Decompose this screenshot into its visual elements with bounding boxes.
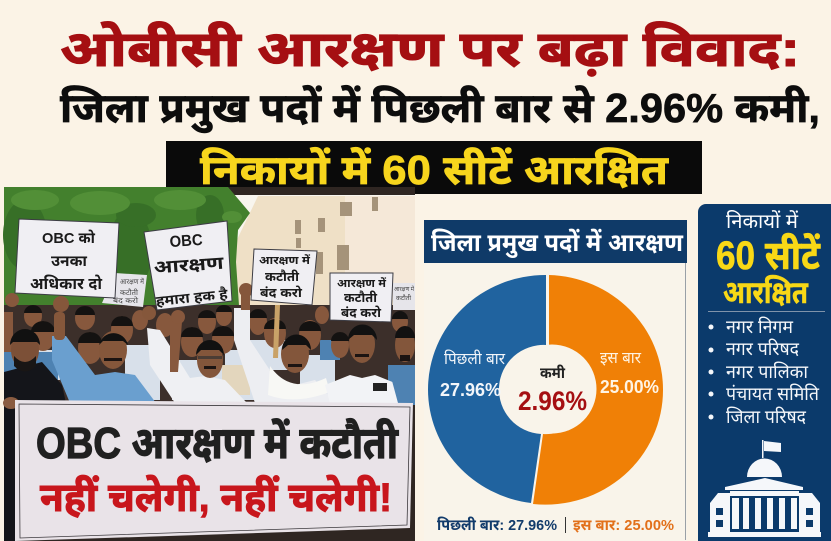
chart legend: [437, 517, 674, 534]
list of bodies: नगर परिषद: [726, 339, 799, 359]
highlighted subtitle: निकायों में 60 सीटें आरक्षित: [200, 147, 670, 193]
label: previous: 27.96%: [440, 380, 501, 400]
placard: आरक्षण में कटौती बंद करो (centre): बंद करो: [260, 285, 303, 300]
small sign right: आरक्षण में: [394, 285, 414, 293]
panel heading: 60 सीटें: [716, 233, 821, 278]
crowd: [3, 283, 415, 541]
placard: आरक्षण में कटौती बंद करो (centre): [251, 249, 317, 305]
panel heading: आरक्षित: [723, 275, 809, 310]
label: current: [600, 350, 659, 397]
placard: OBC आरक्षण हमारा हक है: आरक्षण: [153, 253, 225, 278]
slice: current 25.00%: [533, 275, 663, 505]
raised arm at far left: [4, 293, 19, 352]
man in blue at far right: [388, 326, 415, 403]
small sign behind: कटौती: [120, 289, 138, 297]
small sign behind: [102, 273, 147, 307]
panel heading: जिला प्रमुख पदों में आरक्षण: [431, 228, 684, 258]
icon: government building with flag: [708, 440, 821, 537]
protest photo: [3, 187, 415, 541]
placard: OBC आरक्षण हमारा हक है: [144, 221, 232, 310]
man with white scarf: [234, 283, 335, 403]
panel heading: निकायों में: [726, 209, 799, 233]
slice: previous 27.96%: [428, 275, 546, 503]
panel heading: [716, 209, 821, 310]
centre hole: 2.96%: [518, 386, 587, 416]
panel: district chief reservation: [424, 220, 687, 541]
placard: आरक्षण में कटौती बंद करो (right): कटौती: [344, 290, 378, 305]
title block: [60, 21, 820, 194]
centre hole: [508, 344, 596, 434]
panel heading: [424, 220, 687, 263]
banner: OBC आरक्षण में कटौती: [36, 418, 399, 468]
chart legend: पिछली बार: 27.96%: [437, 517, 557, 534]
placard: आरक्षण में कटौती बंद करो (centre): आरक्षण में: [259, 254, 311, 267]
list of bodies: नगर निगम: [726, 317, 794, 337]
centre hole: कमी: [540, 365, 566, 382]
label: previous: [440, 350, 505, 400]
label: current: 25.00%: [600, 377, 659, 397]
small sign behind: आरक्षण में: [120, 277, 145, 286]
label: previous: पिछली बार: [444, 350, 505, 368]
banner: नहीं चलेगी, नहीं चलेगी!: [40, 475, 392, 520]
placard: आरक्षण में कटौती बंद करो (right): [330, 273, 393, 322]
small sign behind: बंद करो: [113, 297, 138, 305]
panel: bodies with 60 reserved seats: [698, 204, 831, 541]
small sign right: कटौती: [396, 294, 411, 302]
donut chart: [428, 275, 663, 505]
man in white shirt: [142, 306, 247, 403]
list of bodies: नगर पालिका: [726, 362, 808, 382]
man in black shirt: [3, 329, 66, 541]
title line 2: जिला प्रमुख पदों में पिछली बार से 2.96% कमी,: [60, 84, 820, 133]
placard: OBC आरक्षण हमारा हक है: हमारा हक है: [155, 284, 229, 309]
placard: OBC को उनका अधिकार दो: उनका: [51, 253, 88, 270]
list of bodies: जिला परिषद: [726, 407, 806, 427]
placard: OBC को उनका अधिकार दो: अधिकार दो: [30, 275, 102, 293]
chart legend: इस बार: 25.00%: [573, 517, 674, 534]
placard: OBC आरक्षण हमारा हक है: OBC: [169, 232, 204, 251]
placard: आरक्षण में कटौती बंद करो (right): आरक्षण में: [337, 277, 387, 290]
list of bodies: पंचायत समिति: [726, 384, 820, 404]
placard: OBC को उनका अधिकार दो: OBC को: [42, 230, 96, 247]
small sign right: [393, 283, 415, 310]
man in white shirt at right: [325, 324, 412, 403]
placard: OBC को उनका अधिकार दो: [15, 219, 119, 298]
list of bodies: [708, 317, 820, 427]
banner: [15, 400, 413, 541]
placard: आरक्षण में कटौती बंद करो (right): बंद करो: [341, 305, 382, 320]
pole: [273, 305, 280, 358]
placard: आरक्षण में कटौती बंद करो (centre): कटौती: [265, 269, 300, 284]
title line 1: ओबीसी आरक्षण पर बढ़ा विवाद:: [60, 21, 800, 77]
man in blue shirt: [52, 296, 156, 403]
label: current: इस बार: [600, 350, 641, 367]
